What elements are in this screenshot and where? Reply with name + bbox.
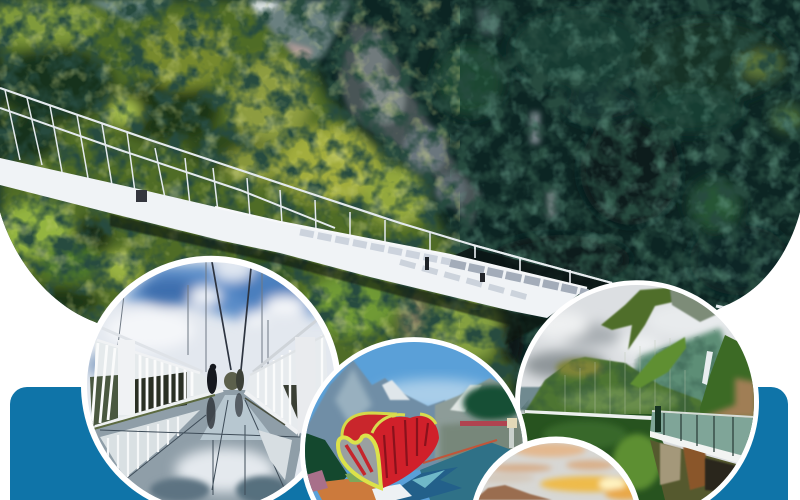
mountains (305, 360, 460, 470)
reflected railings (100, 410, 200, 478)
waterfall (702, 351, 713, 385)
suspension cables (118, 262, 268, 372)
far cable (716, 304, 724, 308)
visitors (206, 364, 244, 429)
photo circle: glass walkway (81, 256, 341, 500)
right railing (245, 366, 268, 392)
distant hills (520, 386, 542, 411)
left railing (95, 346, 118, 376)
green mountain (524, 356, 702, 415)
near bridge rail (215, 207, 587, 288)
blue flower sculpture (388, 467, 462, 500)
distant valley (85, 0, 352, 68)
photo circle: heart sculpture (300, 337, 528, 500)
clouds (523, 302, 735, 379)
glass platform (650, 412, 755, 458)
bridge deck glass side panels (300, 232, 450, 262)
sky and clouds (86, 263, 320, 377)
orange deck (313, 476, 378, 500)
red sign and rope bridge (460, 421, 510, 426)
suspension span (525, 410, 652, 420)
left sunlit foliage (0, 0, 524, 420)
people on the bridge (136, 190, 485, 282)
photo circle: sunset (472, 437, 645, 500)
heart sculpture (338, 413, 439, 488)
panel: blue base (10, 387, 788, 500)
right cliff (700, 335, 755, 440)
left green hill (303, 432, 348, 490)
lower cliff rock (650, 440, 740, 500)
valley forest (522, 414, 665, 500)
dark forest right (436, 10, 800, 295)
sunset hills (474, 485, 552, 500)
glass floor (92, 390, 303, 500)
photo circle: cliff walkway (515, 280, 760, 500)
limestone cliff (338, 8, 556, 230)
dark gap behind far rail (455, 248, 612, 290)
tree branches (601, 286, 722, 388)
water (420, 442, 510, 500)
far bridge railing (0, 88, 612, 284)
bridge underside shadow (110, 214, 550, 345)
mesh of bridge hangers (565, 338, 685, 416)
bridge deck (0, 158, 587, 318)
